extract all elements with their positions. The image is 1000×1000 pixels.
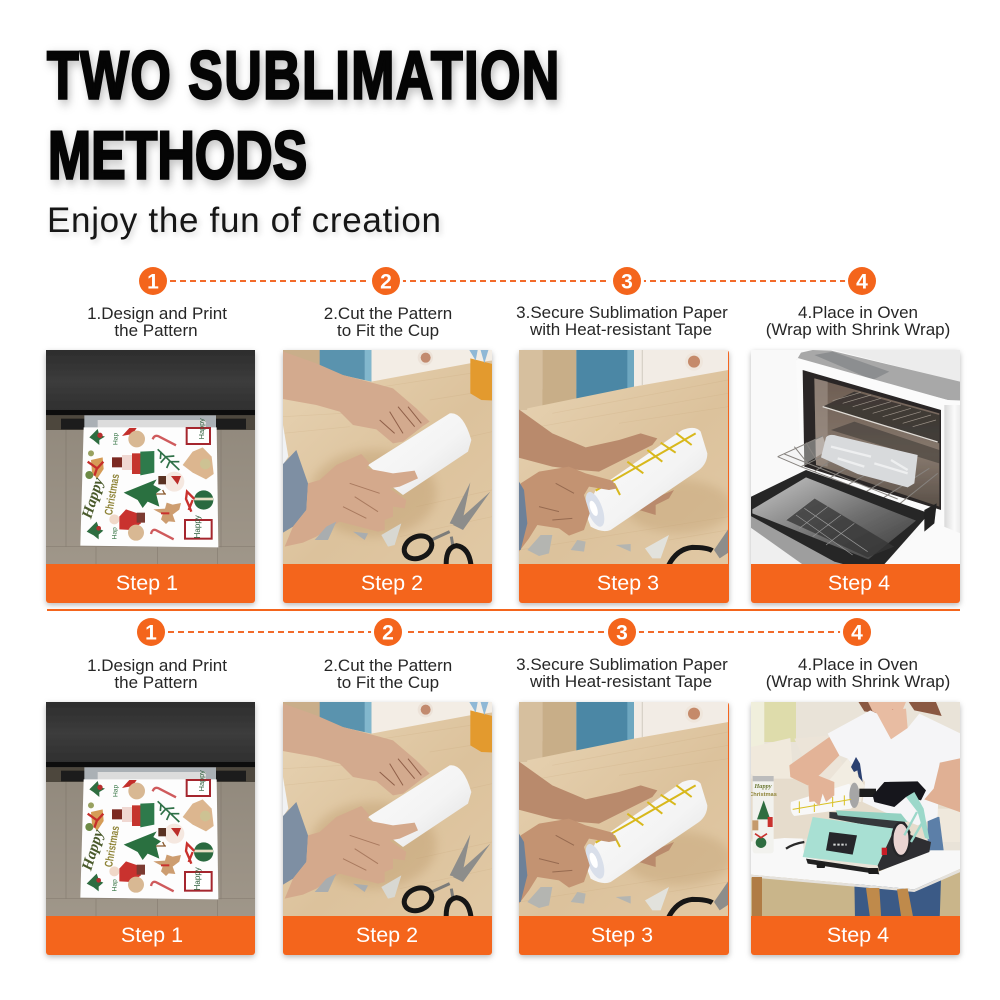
step 1 label: Step 1 — [121, 923, 183, 947]
step number 3: 3 — [621, 270, 633, 294]
step 3 label: Step 3 — [597, 571, 659, 595]
step number 1 — [134, 615, 168, 649]
panel: method 1 step 2 — [279, 346, 496, 603]
caption 3: with Heat-resistant Tape — [529, 672, 712, 691]
caption 2: to Fit the Cup — [337, 673, 439, 692]
step number 3 — [605, 615, 639, 649]
photo: taping paper to the cup — [515, 346, 732, 568]
step 4 label: Step 4 — [827, 923, 889, 947]
subtitle: Enjoy the fun of creation — [47, 201, 441, 240]
photo: printer with sticker sheet — [42, 346, 259, 568]
step number 2 — [371, 615, 405, 649]
title: TWO SUBLIMATION — [47, 37, 559, 113]
caption 2: to Fit the Cup — [337, 321, 439, 340]
caption 4: (Wrap with Shrink Wrap) — [766, 672, 950, 691]
caption 4: (Wrap with Shrink Wrap) — [766, 320, 950, 339]
panel: method 1 step 4 — [747, 346, 964, 603]
photo: woman using mug press: Happy — [753, 783, 772, 790]
photo: hands cutting the pattern — [279, 346, 496, 568]
photo: woman using mug press — [747, 698, 964, 920]
caption 4: 4.Place in Oven — [798, 655, 918, 674]
panel: method 2 step 3 — [515, 698, 732, 955]
photo: woman using mug press: Christmas — [749, 792, 777, 798]
step number 1: 1 — [147, 270, 159, 294]
step 1 label: Step 1 — [116, 571, 178, 595]
step number 4: 4 — [856, 270, 868, 294]
step 2 label: Step 2 — [361, 571, 423, 595]
photo: printer with sticker sheet — [42, 698, 259, 920]
panel: method 2 step 1 — [42, 698, 259, 955]
step 2 label: Step 2 — [356, 923, 418, 947]
step number 3 — [610, 264, 644, 298]
step number 2 — [369, 264, 403, 298]
panel: method 2 step 2 — [279, 698, 496, 955]
caption 1: 1.Design and Print — [87, 656, 227, 675]
title — [47, 37, 559, 193]
panel: method 2 step 4 — [747, 698, 964, 955]
step number 3: 3 — [616, 622, 628, 644]
step number 1 — [136, 264, 170, 298]
step 3 label: Step 3 — [591, 923, 653, 947]
step 4 label: Step 4 — [828, 571, 890, 595]
step number 2: 2 — [382, 622, 394, 644]
caption 1: the Pattern — [114, 673, 198, 692]
caption 3: with Heat-resistant Tape — [529, 320, 712, 339]
method 2 step captions — [87, 655, 950, 692]
caption 2: 2.Cut the Pattern — [324, 656, 452, 675]
step number 4 — [845, 264, 879, 298]
caption 1: 1.Design and Print — [87, 304, 227, 323]
caption 3: 3.Secure Sublimation Paper — [516, 655, 728, 674]
step number 1: 1 — [145, 622, 157, 644]
method 2 step timeline — [134, 615, 874, 649]
caption 1: the Pattern — [114, 321, 198, 340]
panel: method 1 step 3 — [515, 346, 732, 603]
step number 4: 4 — [851, 622, 863, 644]
photo: hands cutting the pattern — [279, 698, 496, 920]
photo: taping paper to the cup — [515, 698, 732, 920]
caption 3: 3.Secure Sublimation Paper — [516, 303, 728, 322]
caption 4: 4.Place in Oven — [798, 303, 918, 322]
panel: method 1 step 1 — [42, 346, 259, 603]
method 1 step captions — [87, 303, 950, 340]
caption 2: 2.Cut the Pattern — [324, 304, 452, 323]
title: METHODS — [48, 117, 307, 193]
step number 4 — [840, 615, 874, 649]
photo: oven with wrapped tumbler — [747, 346, 964, 568]
step number 2: 2 — [380, 270, 392, 294]
method 1 step timeline — [136, 264, 879, 298]
